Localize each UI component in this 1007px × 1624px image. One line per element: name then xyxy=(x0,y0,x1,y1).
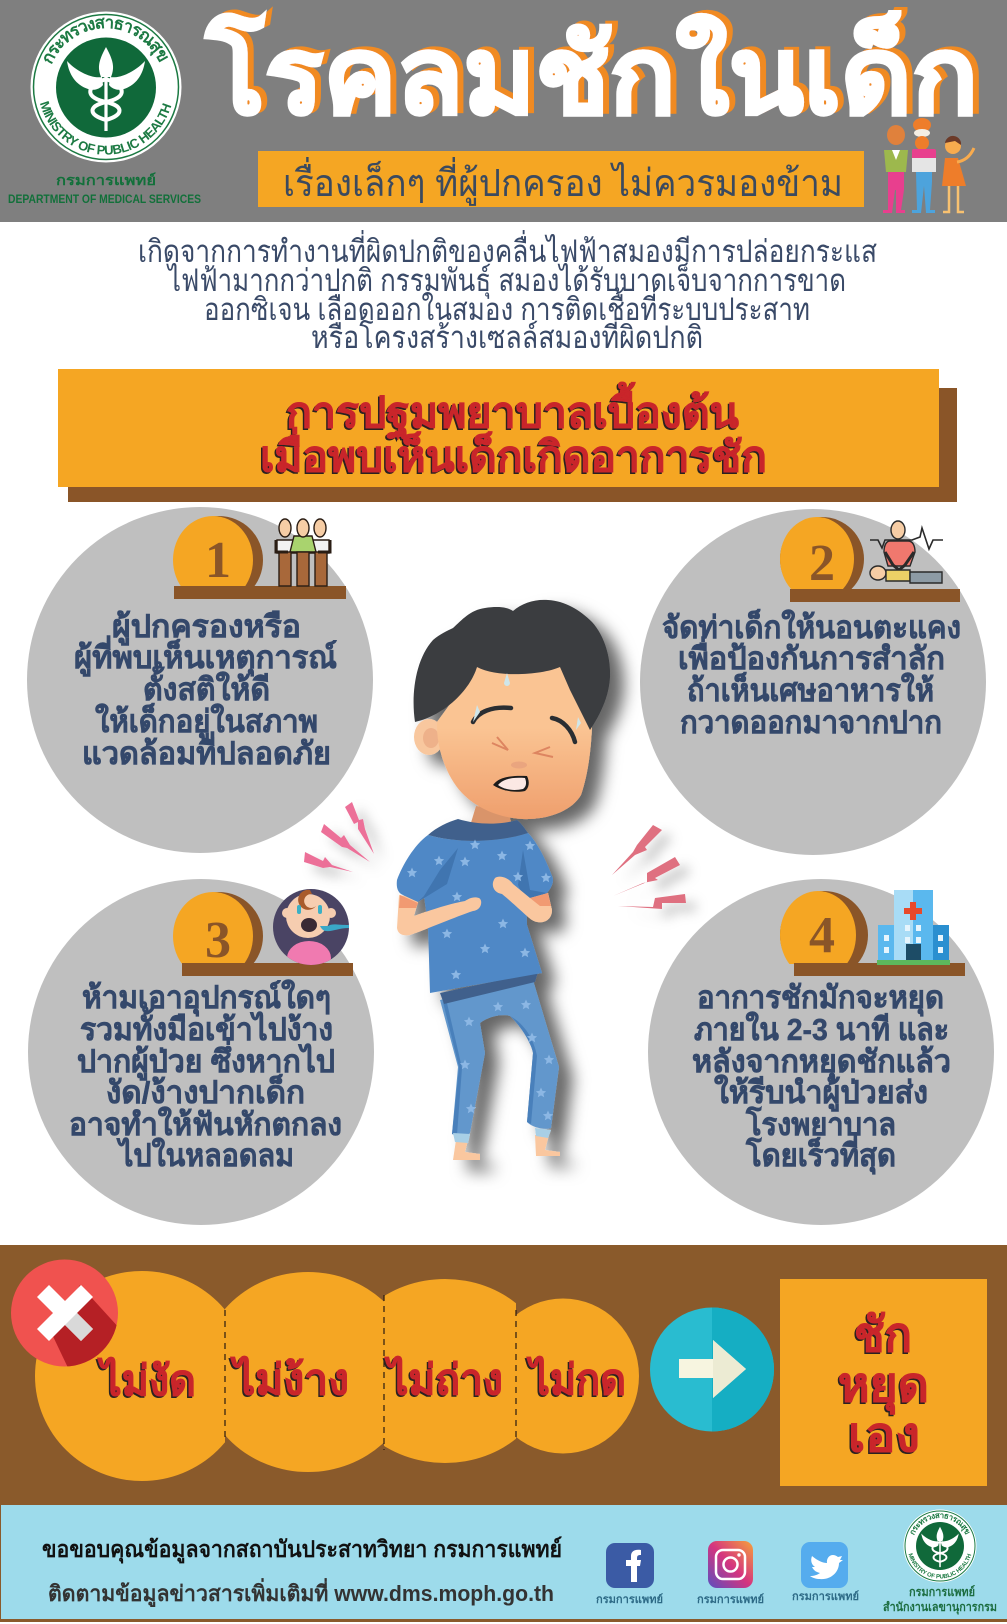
number coin 3: 3 xyxy=(205,912,231,969)
step 4 text: หลังจากหยุดชักแล้ว xyxy=(692,1044,951,1081)
number coin 1: 1 xyxy=(205,532,231,589)
step 1 text: ตั้งสติให้ดี xyxy=(143,666,270,707)
no-action words: ไม่ถ่าง xyxy=(384,1355,503,1403)
orange bubbles xyxy=(35,1271,639,1481)
number coin 1 xyxy=(173,516,263,586)
no-action words: ไม่กด xyxy=(526,1355,626,1403)
nose xyxy=(511,762,527,768)
banner heading: เมื่อพบเห็นเด็กเกิดอาการชัก xyxy=(260,427,767,480)
icon: hospital xyxy=(877,890,950,965)
number coin 2 xyxy=(780,517,864,589)
step 2 text xyxy=(662,608,961,740)
credit text: ขอขอบคุณข้อมูลจากสถาบันประสาทวิทยา กรมการแพทย์ xyxy=(42,1536,562,1564)
icon: red X xyxy=(11,1260,118,1366)
intro text block: หรือโครงสร้างเซลล์สมองที่ผิดปกติ xyxy=(311,316,703,355)
lightning bolts right xyxy=(612,825,686,909)
face xyxy=(437,667,592,819)
icon: facebook: กรมการแพทย์ xyxy=(596,1593,663,1606)
department credit: กรมการแพทย์ xyxy=(909,1585,975,1599)
icon: family xyxy=(883,118,974,213)
step 1 text: ให้เด็กอยู่ในสภาพ xyxy=(95,702,318,741)
small logo: MINISTRY OF PUBLIC HEALTH xyxy=(908,1553,972,1578)
department credit xyxy=(883,1585,997,1615)
mouth xyxy=(493,776,529,792)
step 3 text: ปากผู้ป่วย ซึ่งหากไป xyxy=(77,1039,335,1081)
step 1 text: ผู้ปกครองหรือ xyxy=(112,609,301,646)
number coin 4: 4 xyxy=(809,907,835,964)
no-action words xyxy=(97,1355,626,1404)
closed eyes xyxy=(492,737,553,757)
step 4 text: โรงพยาบาล xyxy=(745,1106,896,1142)
step 4 text: อาการชักมักจะหยุด xyxy=(697,980,944,1017)
panel: step 3 xyxy=(28,879,374,1225)
right arm xyxy=(493,877,552,922)
department name: กรมการแพทย์ xyxy=(56,172,156,188)
result box: เอง xyxy=(848,1409,920,1462)
small logo: กระทรวงสาธารณสุข xyxy=(910,1513,970,1536)
step 4 text: ให้รีบนำผู้ป่วยส่ง xyxy=(714,1074,928,1112)
illustration: boy having a seizure xyxy=(397,600,610,1160)
step 3 text: รวมทั้งมือเข้าไปง้าง xyxy=(80,1006,333,1047)
step 2 text: เพื่อป้องกันการสำลัก xyxy=(678,636,945,676)
title: โรคลมชักในเด็ก xyxy=(205,11,978,136)
icon: three people xyxy=(276,519,330,586)
footer xyxy=(0,1504,1007,1622)
icon: baby with spoon xyxy=(273,889,349,965)
step 3 text xyxy=(69,979,342,1173)
step 1 text xyxy=(74,609,337,771)
step 3 text: งัด/ง้างปากเด็ก xyxy=(106,1073,305,1110)
left arm xyxy=(397,895,481,935)
result box: ชัก xyxy=(854,1309,912,1362)
step 2 text: กวาดออกมาจากปาก xyxy=(680,705,942,740)
intro text block: ไฟฟ้ามากกว่าปกติ กรรมพันธุ์ สมองได้รับบาดเจ็บจากการขาด xyxy=(165,262,846,300)
subtitle bar xyxy=(258,151,864,207)
icon: instagram xyxy=(697,1541,764,1606)
step 3 text: ไปในหลอดลม xyxy=(116,1137,294,1173)
bottom panel: do not xyxy=(0,1245,1007,1504)
no-action words: ไม่ง้าง xyxy=(230,1355,349,1403)
website text: ติดตามข้อมูลข่าวสารเพิ่มเติมที่ www.dms.moph.go.th xyxy=(48,1577,554,1608)
intro text block: ออกซิเจน เลือดออกในสมอง การติดเชื้อที่ระบบประสาท xyxy=(204,287,810,327)
intro text block xyxy=(138,230,877,355)
subtitle bar: เรื่องเล็กๆ ที่ผู้ปกครอง ไม่ควรมองข้าม xyxy=(283,157,843,206)
small logo xyxy=(904,1510,976,1582)
legs and feet xyxy=(453,1135,560,1160)
step 4 text: โดยเร็วที่สุด xyxy=(745,1133,896,1175)
panel: step 1 xyxy=(27,507,373,853)
logo: Ministry of Public Health: MINISTRY OF PUBLIC HEALTH xyxy=(40,101,172,155)
intro text block: เกิดจากการทำงานที่ผิดปกติของคลื่นไฟฟ้าสมองมีการปล่อยกระแส xyxy=(138,230,877,269)
step 3 text: อาจทำให้ฟันหักตกลง xyxy=(69,1106,342,1142)
logo: Ministry of Public Health xyxy=(30,12,182,162)
hair xyxy=(414,600,610,730)
logo: Ministry of Public Health: กระทรวงสาธารณสุข xyxy=(44,18,168,64)
banner heading xyxy=(58,369,957,502)
waistband xyxy=(440,972,538,1004)
trousers xyxy=(440,980,559,1136)
icon: facebook xyxy=(596,1543,663,1606)
stars xyxy=(407,840,554,1120)
shirt xyxy=(397,833,553,993)
department credit: สำนักงานเลขานุการกรม xyxy=(883,1600,997,1615)
arrow xyxy=(650,1308,774,1432)
step 4 text xyxy=(692,980,951,1175)
header band xyxy=(0,0,1007,222)
step 2 text: ถ้าเห็นเศษอาหารให้ xyxy=(687,671,934,708)
step 2 text: จัดท่าเด็กให้นอนตะแคง xyxy=(662,608,961,645)
icon: twitter xyxy=(792,1542,859,1603)
number coin 4 xyxy=(780,891,868,964)
ear xyxy=(414,719,444,755)
lightning bolts left xyxy=(304,802,374,872)
number coin 3 xyxy=(173,892,263,964)
no-action words: ไม่งัด xyxy=(97,1356,196,1404)
step 3 text: ห้ามเอาอุปกรณ์ใดๆ xyxy=(82,979,331,1017)
panel: step 2 xyxy=(640,509,986,855)
eyebrows xyxy=(473,708,575,742)
step 4 text: ภายใน 2-3 นาที และ xyxy=(694,1011,949,1047)
step 1 text: ผู้ที่พบเห็นเหตุการณ์ xyxy=(74,635,337,677)
neck xyxy=(470,806,512,826)
banner heading: การปฐมพยาบาลเบื้องต้น xyxy=(286,381,739,440)
sweat drops xyxy=(473,673,581,730)
step 1 text: แวดล้อมที่ปลอดภัย xyxy=(82,731,331,771)
panel: step 4 xyxy=(648,879,994,1225)
number coin 2: 2 xyxy=(809,535,835,592)
result box: หยุด xyxy=(838,1359,929,1415)
result box xyxy=(780,1279,987,1486)
icon: twitter: กรมการแพทย์ xyxy=(792,1590,859,1603)
department name xyxy=(8,172,201,206)
icon: CPR xyxy=(870,521,943,583)
icon: instagram: กรมการแพทย์ xyxy=(697,1593,764,1606)
department name: DEPARTMENT OF MEDICAL SERVICES xyxy=(8,194,201,206)
